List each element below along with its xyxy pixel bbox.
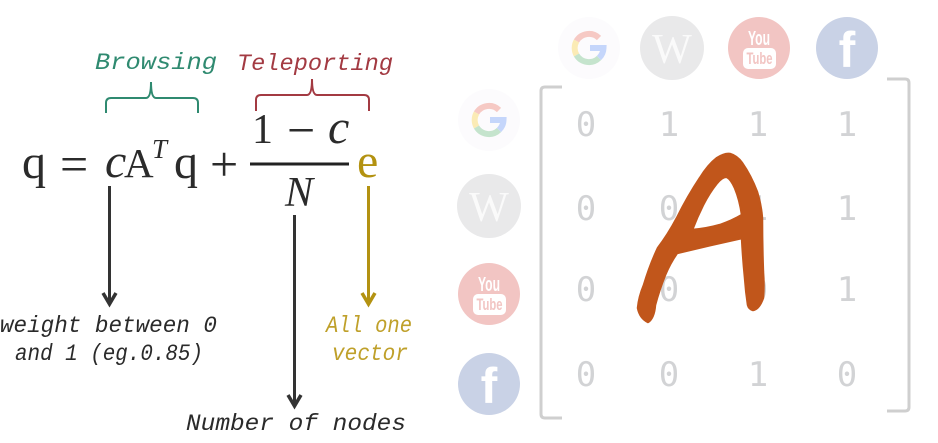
icon: facebook left — [458, 353, 520, 415]
formula: 1 — [252, 107, 273, 153]
icon column: left — [457, 89, 521, 415]
icon row: top — [558, 16, 878, 80]
matrix values: 0 — [837, 355, 857, 395]
arrow: number of nodes — [288, 215, 301, 406]
formula: A — [124, 140, 154, 186]
brace: teleporting — [256, 79, 369, 111]
brace: browsing — [106, 82, 198, 113]
formula: c — [328, 101, 349, 154]
label: weight between 0 and 1 — [0, 313, 217, 367]
matrix values: 1 — [748, 189, 768, 229]
hand-drawn letter A — [638, 154, 764, 322]
label: number of nodes: Number of nodes — [186, 411, 406, 437]
arrow: all one vector — [362, 186, 375, 304]
icon: facebook left: f — [481, 358, 498, 414]
matrix values: 1 — [748, 355, 768, 395]
formula: = — [60, 136, 88, 192]
formula: q — [22, 136, 46, 189]
matrix values: 0 — [659, 270, 679, 310]
label: all one vector: vector — [332, 341, 408, 367]
matrix values: 1 — [837, 270, 857, 310]
formula: e — [357, 135, 378, 188]
matrix values: 0 — [659, 189, 679, 229]
label: all one vector: All one — [324, 313, 412, 339]
icon: wikipedia left: W — [469, 185, 509, 231]
icon: facebook top — [816, 17, 878, 79]
label: weight between 0 and 1: weight between 0 — [0, 313, 217, 339]
icon: youtube top: Tube — [746, 49, 773, 68]
matrix values: 0 — [659, 355, 679, 395]
matrix values: 0 — [576, 270, 596, 310]
icon: youtube top: You — [748, 28, 770, 50]
icon: facebook top: f — [839, 22, 856, 78]
matrix values: 0 — [748, 270, 768, 310]
formula: + — [210, 136, 238, 192]
formula — [22, 101, 378, 216]
icon: youtube left: Tube — [476, 295, 503, 314]
label: weight between 0 and 1: and 1 (eg.0.85) — [15, 341, 203, 367]
formula: q — [174, 136, 198, 189]
matrix values: 1 — [659, 105, 679, 145]
icon: wikipedia top: W — [652, 27, 692, 73]
formula: N — [284, 170, 315, 216]
formula: c — [105, 135, 126, 188]
icon: youtube left — [458, 263, 520, 325]
icon: youtube top — [728, 17, 790, 79]
icon: youtube left: You — [478, 274, 500, 296]
formula: T — [152, 134, 169, 164]
matrix values: 0 — [576, 189, 596, 229]
formula: − — [287, 102, 315, 158]
icon: google left — [458, 89, 520, 151]
matrix values: 1 — [748, 105, 768, 145]
icon: google top — [558, 17, 620, 79]
matrix values: 0 — [576, 105, 596, 145]
heading: Teleporting: Teleporting — [237, 51, 393, 77]
matrix values: 0 — [576, 355, 596, 395]
heading: Browsing: Browsing — [95, 50, 217, 76]
icon: wikipedia left — [457, 174, 521, 238]
matrix values: 1 — [837, 105, 857, 145]
label: all one vector — [324, 313, 412, 367]
matrix values — [576, 105, 857, 395]
matrix brackets — [541, 79, 909, 418]
matrix values: 1 — [837, 189, 857, 229]
icon: wikipedia top — [640, 16, 704, 80]
arrow: weight — [103, 186, 116, 304]
